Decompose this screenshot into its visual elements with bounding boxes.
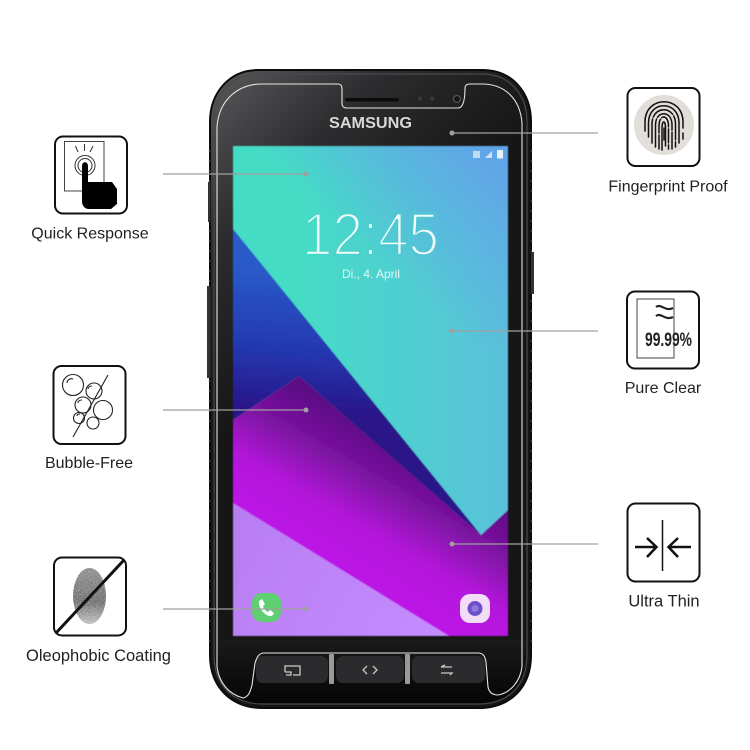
icon: camera app [460, 594, 490, 623]
feature: fingerprint proof [608, 88, 728, 196]
icon: touch [55, 136, 127, 214]
screen wallpaper [233, 146, 508, 636]
clock: 12:45 [302, 201, 439, 268]
status bar [473, 150, 503, 158]
hardware buttons [256, 654, 485, 684]
feature: oleophobic coating [26, 558, 171, 665]
feature: ultra thin [628, 504, 700, 610]
callout lines [163, 130, 598, 612]
label: Quick Response [31, 226, 149, 242]
label: Ultra Thin [628, 592, 700, 610]
side grip ridges [210, 150, 532, 650]
feature: bubble-free [45, 366, 133, 472]
callout: bubble-free [163, 408, 308, 412]
icon: 99.99% clarity: 99.99% [645, 330, 692, 351]
speaker and camera [345, 96, 460, 102]
phone body [210, 70, 531, 708]
label: Pure Clear [625, 380, 702, 397]
callout: oleophobic coating [163, 606, 308, 612]
feature: pure clear [625, 292, 702, 397]
icon: fingerprint [628, 88, 700, 166]
glass protector outline [217, 84, 522, 698]
brand logo: SAMSUNG [329, 115, 412, 132]
icon: crossed-out fingerprint [54, 558, 126, 636]
callout: pure clear [450, 328, 598, 334]
callout: quick response [163, 172, 308, 176]
icon: compress arrows [628, 504, 700, 582]
callout: ultra thin [450, 542, 598, 546]
label: Fingerprint Proof [608, 178, 728, 196]
side buttons [207, 182, 534, 378]
icon: phone app [252, 593, 281, 622]
label: Bubble-Free [45, 455, 133, 472]
date: Di., 4. April [342, 267, 400, 281]
feature: quick response [31, 136, 149, 242]
callout: fingerprint proof [450, 130, 598, 136]
phone [207, 70, 534, 708]
label: Oleophobic Coating [26, 647, 171, 665]
chin shading [214, 640, 527, 704]
inner rim [214, 74, 527, 704]
icon: bubbles [54, 366, 126, 444]
